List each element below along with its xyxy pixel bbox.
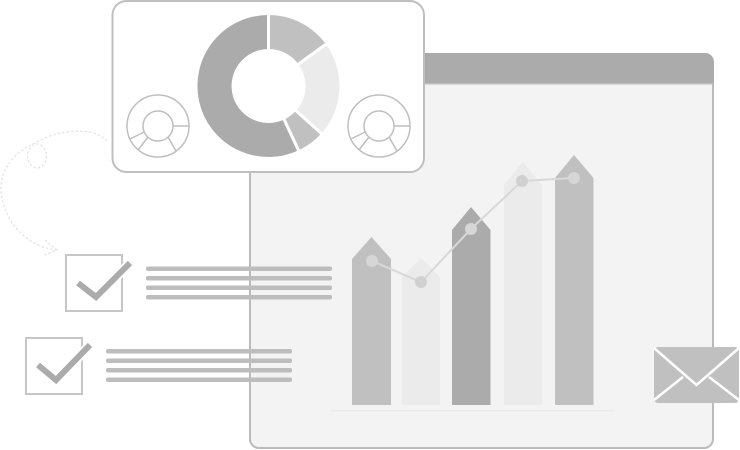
bar 4 bbox=[504, 162, 542, 405]
bar 2 bbox=[402, 258, 440, 405]
bar chart bbox=[330, 155, 615, 412]
checkbox 1 bbox=[66, 255, 130, 311]
checkbox 2 bbox=[26, 338, 90, 394]
panel: donut chart card bbox=[112, 1, 424, 172]
dashed arrow bbox=[1, 131, 107, 256]
bar 3 bbox=[452, 207, 490, 405]
small ring chart left bbox=[127, 95, 189, 157]
text lines 1 bbox=[146, 266, 332, 300]
bar 5 bbox=[555, 155, 594, 405]
donut chart bbox=[196, 13, 341, 159]
bar 1 bbox=[352, 237, 391, 405]
icon: envelope bbox=[654, 347, 739, 403]
small ring chart right bbox=[348, 95, 410, 157]
text lines 2 bbox=[106, 349, 292, 382]
trend line bbox=[366, 172, 580, 288]
panel: browser window bbox=[249, 53, 714, 448]
